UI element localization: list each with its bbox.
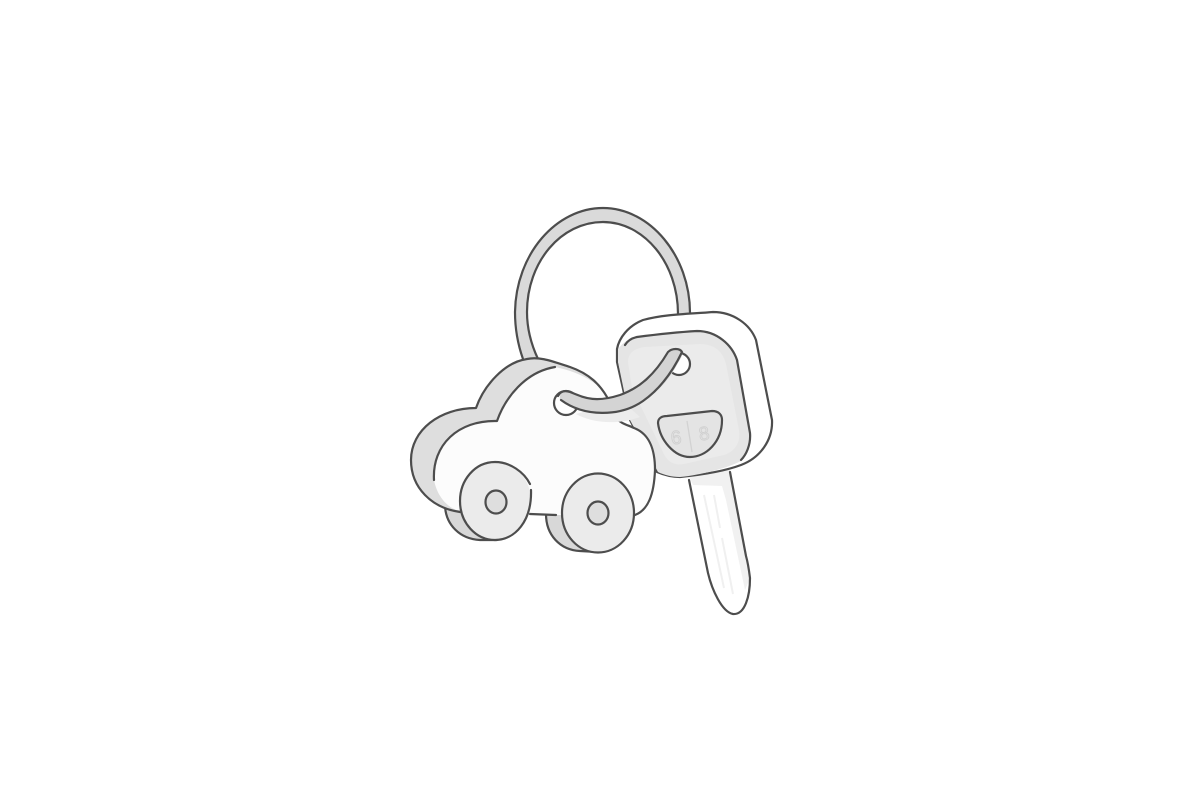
- key: head and blade: [617, 312, 772, 614]
- key button with digits: [658, 411, 722, 457]
- key hole: [668, 353, 690, 375]
- key head front face: [618, 331, 750, 477]
- car body back shell: [411, 358, 655, 515]
- ring: lower loop through car and key: [558, 349, 682, 413]
- rear wheel left: [445, 500, 497, 540]
- front wheel right: [562, 474, 634, 552]
- front wheel left: [459, 462, 531, 540]
- key head back shell: [617, 312, 772, 477]
- key button with digits: 6: [670, 427, 683, 450]
- key blade: [689, 468, 750, 614]
- car keychain hole: [554, 391, 578, 415]
- ring shadow on car: [576, 408, 640, 422]
- ring: upper loop: [515, 208, 690, 359]
- car keychain: [411, 358, 655, 552]
- key button with digits: 8: [698, 423, 711, 446]
- car body front face: [411, 358, 655, 515]
- rear wheel right: [546, 510, 598, 552]
